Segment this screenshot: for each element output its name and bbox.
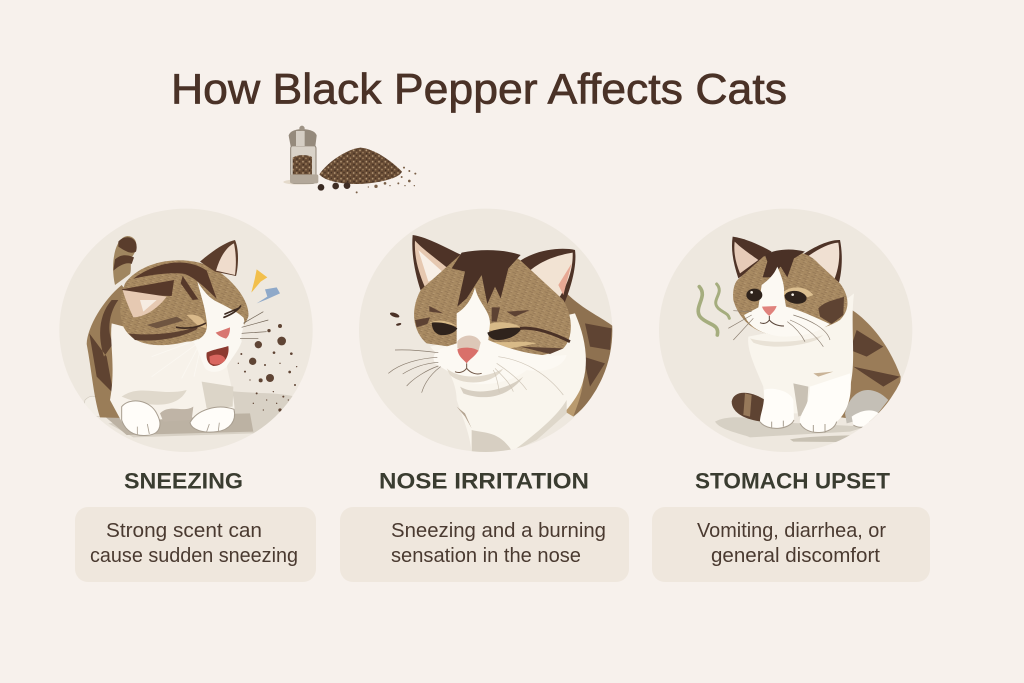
- heading: stomach upset: STOMACH UPSET: [695, 468, 891, 494]
- closed eyes: [177, 306, 241, 328]
- right eye: [487, 328, 570, 342]
- text block: sneezing description: Strong scent can: [106, 520, 262, 542]
- whiskers: [388, 350, 441, 393]
- cheek tan: [428, 321, 537, 348]
- eyes: [746, 289, 762, 301]
- head stripes: [452, 250, 521, 307]
- pepper burst: [238, 324, 297, 412]
- pepper shaker: [283, 126, 318, 185]
- right ear: [517, 249, 575, 304]
- panel: stomach upset illustration: [659, 209, 912, 452]
- icon: green odor waves: [698, 284, 729, 335]
- nose: [216, 327, 230, 339]
- text block: stomach upset description: Vomiting, diarrhea, or: [697, 520, 886, 542]
- chest shadow: [750, 335, 823, 347]
- heading: nose irritation: NOSE IRRITATION: [379, 468, 589, 494]
- head: [414, 251, 571, 357]
- text block: stomach upset description: general discomfort: [711, 545, 880, 567]
- whiskers: [728, 311, 830, 347]
- title: How Black Pepper Affects Cats: [171, 66, 787, 114]
- ear: [200, 240, 238, 276]
- white blaze and muzzle: [434, 288, 543, 371]
- icon: blue spark: [257, 287, 280, 303]
- nose: [457, 335, 481, 352]
- icon: irritation marks: [390, 312, 402, 326]
- body: [748, 293, 854, 413]
- text block: sneezing description: [75, 507, 316, 582]
- white face blaze: [193, 282, 244, 372]
- head: [733, 251, 847, 335]
- panel: nose irritation illustration: [359, 209, 613, 453]
- cat: sitting tabby: [728, 237, 901, 433]
- heading: sneezing: SNEEZING: [124, 468, 243, 494]
- chest fur: [430, 313, 586, 453]
- text block: sneezing description: cause sudden sneezing: [90, 545, 298, 567]
- icon: yellow spark: [251, 269, 267, 293]
- brown flank: [86, 285, 124, 418]
- right ear: [804, 240, 842, 282]
- ground shadow: [715, 417, 867, 442]
- tail: [732, 393, 765, 422]
- panel: sneezing illustration: [59, 209, 313, 452]
- whiskers: [192, 339, 198, 342]
- text block: stomach upset description: [652, 507, 930, 582]
- head: [120, 260, 248, 345]
- face white: [744, 267, 830, 337]
- paws: [122, 401, 160, 436]
- tan eye patches: [784, 287, 813, 297]
- mouth: [207, 346, 229, 366]
- ground shadow: [105, 391, 295, 437]
- text block: nose irritation description: Sneezing and a burning: [391, 520, 606, 542]
- text block: nose irritation description: sensation in the nose: [391, 545, 581, 567]
- left ear: [732, 237, 772, 278]
- cat: close-up face: [388, 235, 613, 453]
- left ear: [412, 235, 462, 291]
- icon: pepper shaker and pile: [283, 126, 416, 193]
- text block: nose irritation description: [340, 507, 629, 582]
- cat: sneezing tabby: [84, 236, 268, 436]
- back and haunch: [837, 307, 901, 423]
- pepper pile: [318, 148, 416, 193]
- nose: [762, 306, 777, 316]
- paws: [760, 389, 794, 428]
- white body: [110, 323, 235, 422]
- left eye: [432, 322, 457, 335]
